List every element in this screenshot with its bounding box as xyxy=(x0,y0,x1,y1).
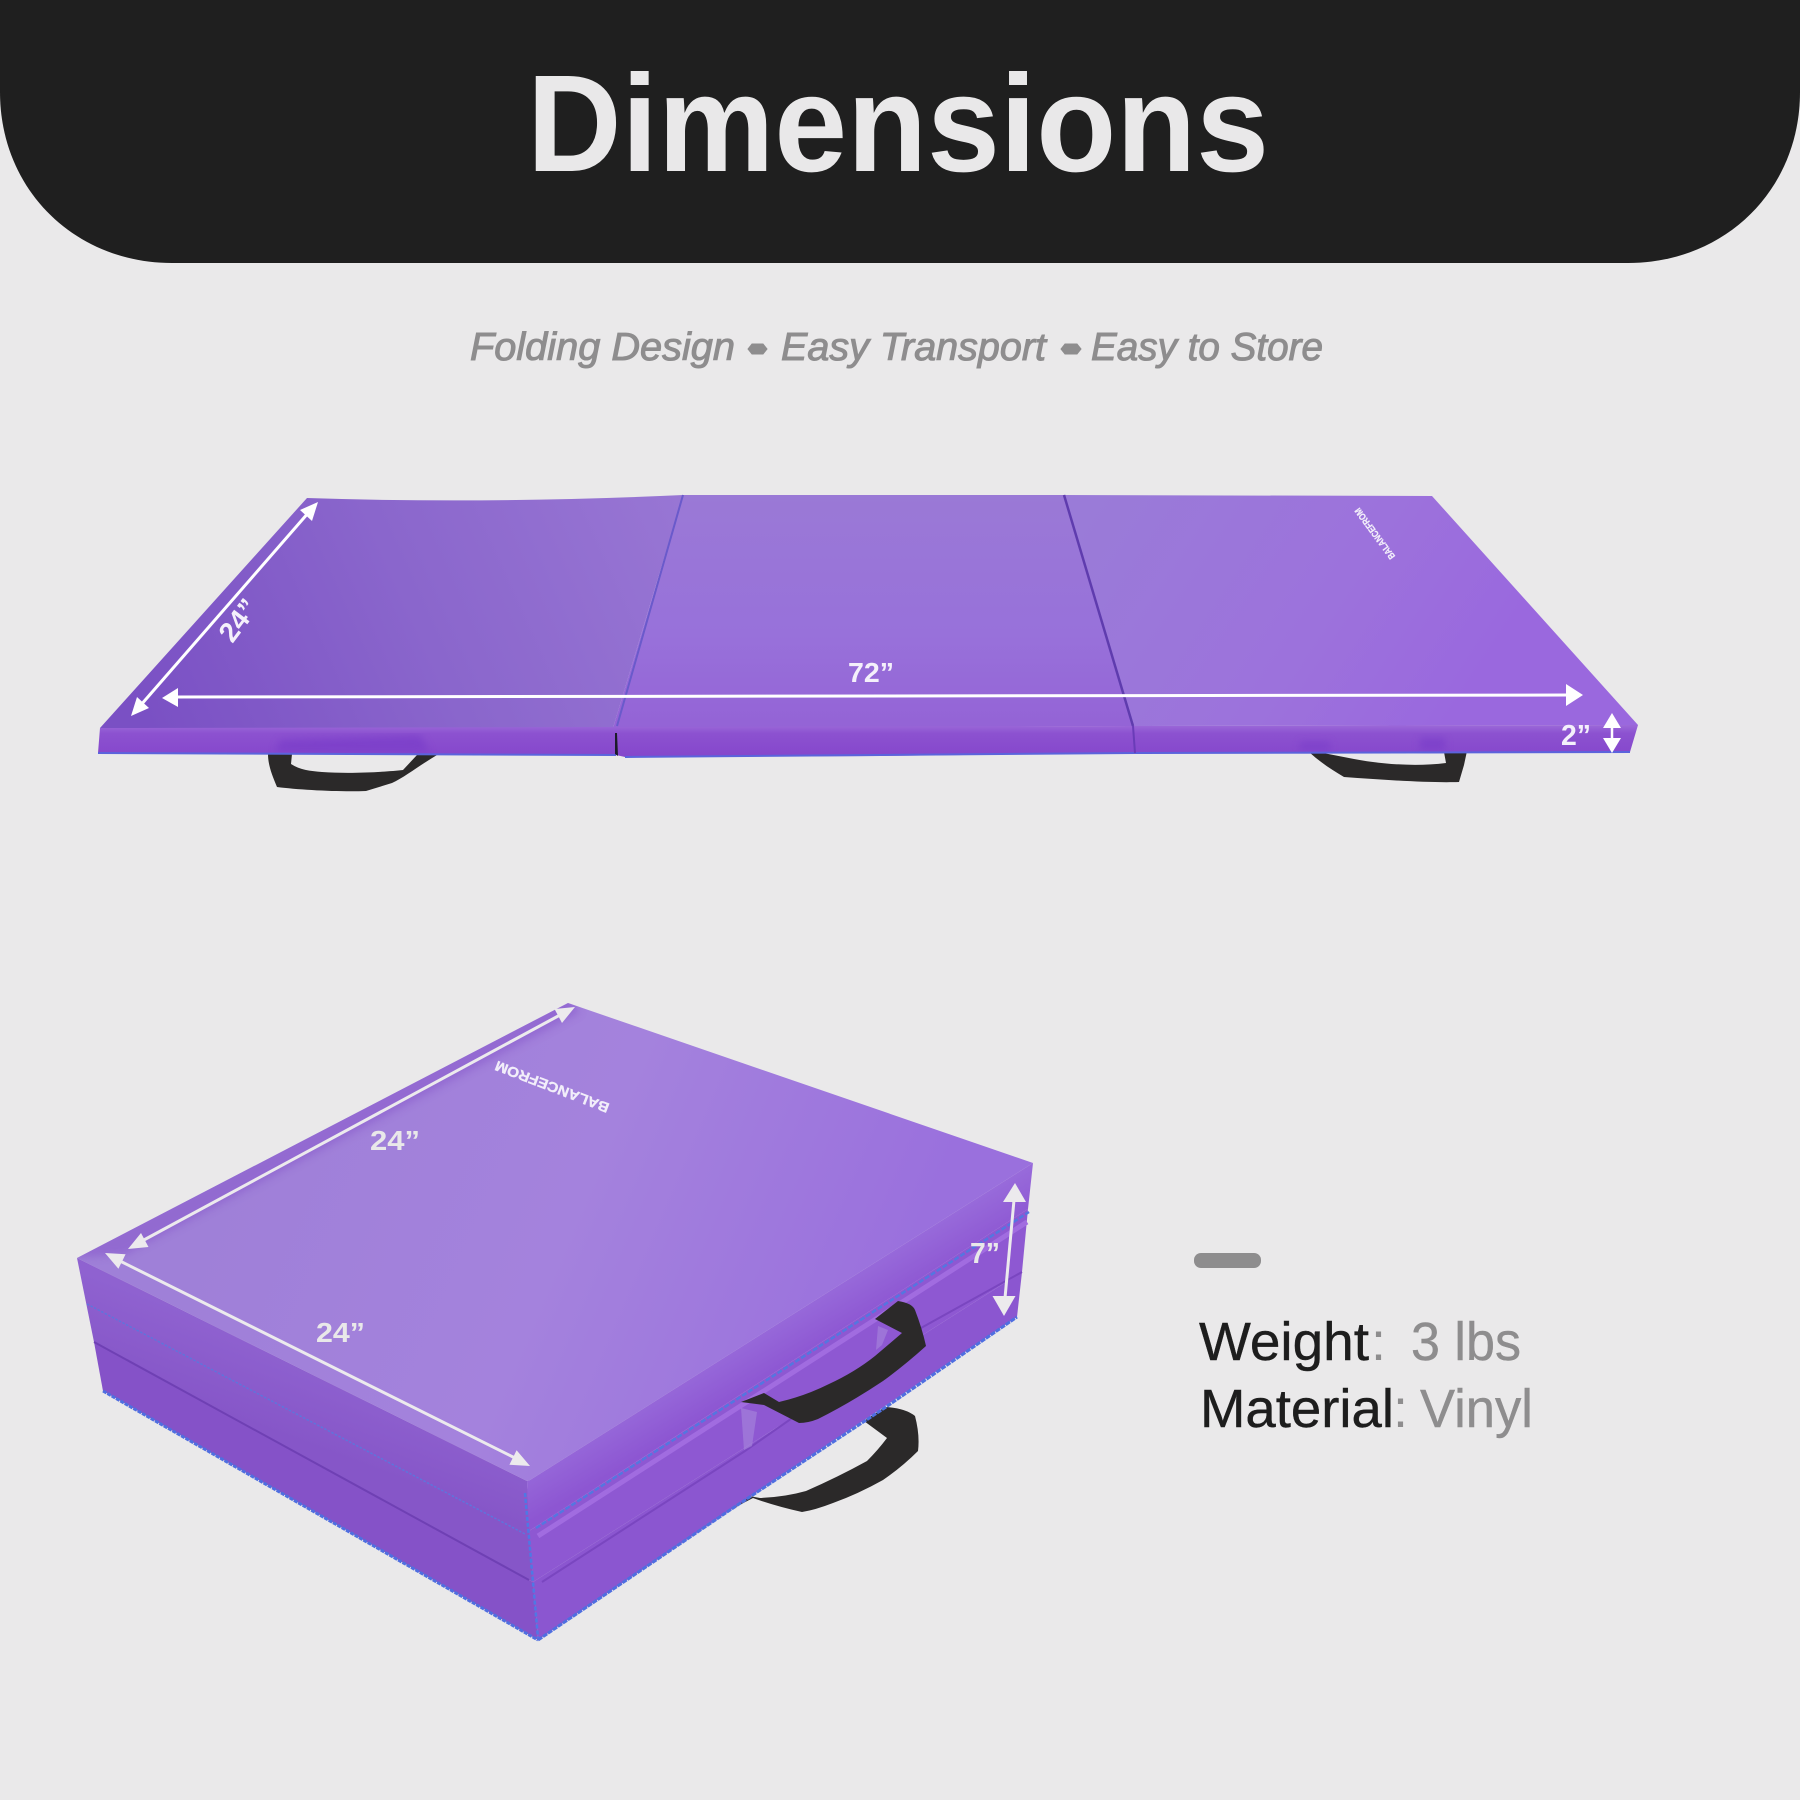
left side face upper xyxy=(77,1258,533,1582)
right seam band xyxy=(538,1222,1027,1536)
top face xyxy=(77,1003,1033,1481)
mat panel: middle xyxy=(613,495,1133,728)
arrow: folded depth xyxy=(105,1253,530,1466)
left side stitching xyxy=(87,1304,525,1534)
right side upper band xyxy=(527,1163,1033,1531)
fold line right xyxy=(1064,495,1133,726)
mat panel: right xyxy=(1064,495,1638,726)
handle: lower xyxy=(732,1407,919,1512)
label: folded width: 24” xyxy=(370,1125,420,1156)
brand text: BALANCEFROM xyxy=(1353,505,1398,561)
label: 24 inch width: 24” xyxy=(212,593,264,648)
arrow: 2 inch thickness xyxy=(1603,713,1621,753)
left side face lower xyxy=(94,1342,538,1640)
handle shadow upper xyxy=(876,1326,888,1350)
weight colon: : xyxy=(1371,1312,1386,1372)
spec value: weight: 3 lbs xyxy=(1411,1312,1521,1372)
front edge shaded patches xyxy=(275,735,1445,752)
label: folded depth: 24” xyxy=(316,1317,365,1348)
title: Dimensions xyxy=(527,47,1269,201)
bottom stitching right xyxy=(538,1317,1017,1640)
handle: left xyxy=(268,754,437,791)
arrow: 72 inch length xyxy=(162,684,1583,707)
handle: upper xyxy=(741,1301,926,1423)
fold notch xyxy=(1133,726,1135,753)
corner stitching xyxy=(525,1493,538,1638)
right side middle band xyxy=(529,1209,1028,1582)
brand text: BALANCEFROM xyxy=(493,1058,611,1116)
spec value: material: Vinyl xyxy=(1420,1379,1533,1439)
arrow: folded height xyxy=(992,1183,1026,1316)
right groove xyxy=(542,1272,1022,1582)
spec label: weight: Weight xyxy=(1199,1312,1369,1372)
mat panel: left xyxy=(100,495,683,728)
label: folded height: 7” xyxy=(970,1238,1000,1270)
unfolded mat xyxy=(98,495,1638,791)
spec divider xyxy=(1194,1253,1261,1268)
arrow: 24 inch width xyxy=(131,502,318,716)
specifications xyxy=(1199,1312,1533,1439)
right side lower band xyxy=(533,1272,1022,1640)
handle shadow lower xyxy=(741,1408,757,1450)
fold line left xyxy=(617,495,683,726)
spec label: material: Material xyxy=(1200,1379,1394,1439)
front stitching xyxy=(98,752,1630,757)
label: 2 inch thickness: 2” xyxy=(1561,720,1591,752)
front edge xyxy=(98,725,1638,757)
right seam xyxy=(536,1212,1029,1528)
arrow: folded width xyxy=(128,1007,575,1249)
separator dot 1 xyxy=(748,344,767,354)
tagline item: easy transport: Easy Transport xyxy=(781,326,1048,369)
fold gap xyxy=(615,733,618,756)
top face back edge shading xyxy=(60,996,580,1258)
left groove xyxy=(94,1342,529,1580)
bottom stitching left xyxy=(103,1391,538,1640)
separator dot 2 xyxy=(1061,344,1081,354)
tagline item: easy to store: Easy to Store xyxy=(1091,326,1323,369)
folded mat xyxy=(60,996,1033,1640)
header band xyxy=(0,0,1800,263)
label: 72 inch: 72” xyxy=(848,657,894,688)
handle: right xyxy=(1309,751,1467,782)
tagline xyxy=(470,326,1323,369)
material colon: : xyxy=(1393,1379,1408,1439)
tagline item: folding design: Folding Design xyxy=(470,326,735,369)
